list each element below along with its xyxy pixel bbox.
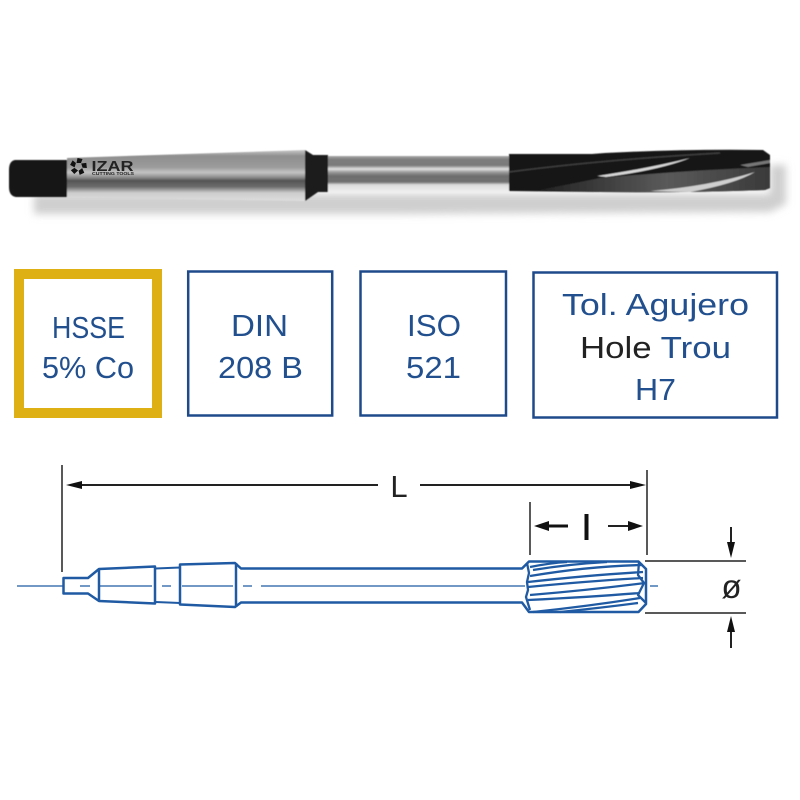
dimension diameter	[645, 527, 746, 648]
dimension l	[530, 502, 643, 555]
badge: DIN standard: 208 B	[218, 350, 303, 385]
badge: hole tolerance	[534, 272, 777, 418]
badge: material: HSSE	[52, 310, 125, 345]
black collar	[305, 150, 328, 201]
logo star	[70, 158, 88, 176]
badge: material: 5% Co	[42, 350, 134, 385]
dimension L	[62, 465, 647, 572]
badge: material	[19, 274, 157, 413]
badge: hole tolerance: Tol. Agujero	[562, 287, 749, 322]
badge: hole tolerance: Hole Trou	[580, 330, 731, 365]
badge: ISO standard: ISO	[407, 308, 461, 343]
logo tagline: CUTTING TOOLS	[92, 171, 134, 176]
dimension diameter: ø	[721, 568, 742, 605]
badge: ISO standard	[360, 272, 506, 416]
dimension L: L	[390, 469, 408, 504]
shank outline	[64, 566, 155, 604]
reamer outline	[17, 562, 658, 612]
badge: ISO standard: 521	[406, 350, 461, 385]
flutes head	[526, 562, 646, 612]
badge: hole tolerance: H7	[635, 372, 676, 407]
logo wordmark: IZAR	[92, 158, 134, 175]
tapered steel shank	[67, 150, 305, 201]
reamer body	[9, 150, 770, 201]
technical drawing	[17, 465, 746, 648]
tool shadow	[34, 165, 786, 214]
badge: DIN standard	[188, 272, 332, 416]
centre line	[17, 585, 658, 587]
black knurled grip	[9, 160, 67, 197]
fluted cutting section	[509, 150, 770, 192]
IZAR logo	[70, 158, 134, 176]
steel shaft	[328, 156, 509, 192]
badge: DIN standard: DIN	[231, 308, 288, 343]
product photo: reamer	[9, 150, 786, 214]
